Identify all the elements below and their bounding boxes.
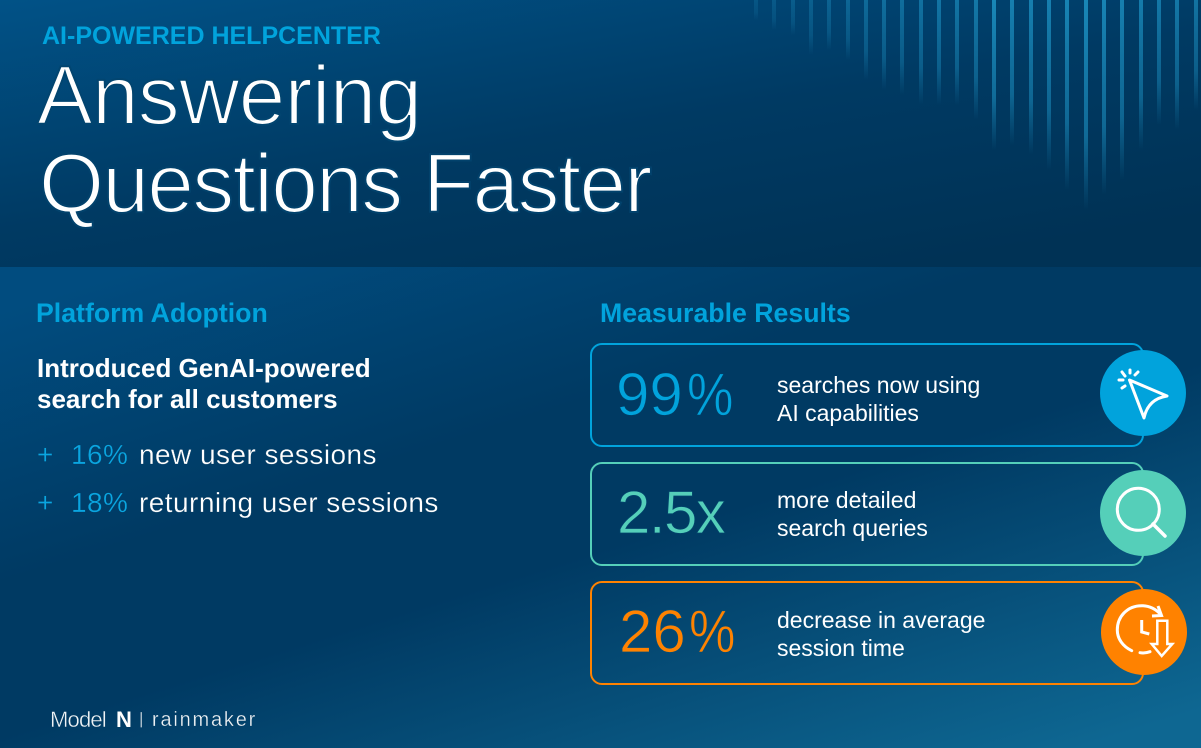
card: 2.5x	[590, 462, 1144, 566]
title: Questions Faster	[39, 136, 651, 230]
text: queries: search queries	[777, 515, 928, 541]
number: 99%: 99	[616, 361, 683, 428]
eyebrow heading: AI-POWERED HELPCENTER	[42, 22, 381, 50]
logo	[50, 707, 257, 732]
heading: platform adoption: Platform Adoption	[36, 298, 268, 328]
panel: platform adoption	[36, 298, 439, 518]
text: searches: AI capabilities	[777, 400, 919, 426]
heading: measurable results: Measurable Results	[600, 298, 851, 328]
number: 26%: %	[689, 598, 735, 665]
stat: new user sessions	[37, 439, 377, 470]
stat: returning user sessions: returning user sessions	[139, 487, 439, 518]
icon: clock with down arrow	[1101, 589, 1187, 675]
number: 26%: 26	[619, 598, 686, 665]
card: 26%	[590, 581, 1144, 685]
text: session time: session time	[777, 635, 905, 661]
text: session time	[777, 607, 985, 661]
text: session time: decrease in average	[777, 607, 985, 633]
title: Answering	[37, 48, 421, 142]
stat: returning user sessions: +	[37, 487, 54, 518]
stat: new user sessions: +	[37, 439, 54, 470]
text: introduced GenAI search	[37, 353, 371, 414]
logo: N	[116, 707, 132, 732]
number: 99%	[616, 361, 733, 428]
stat: new user sessions: 16%	[71, 439, 128, 470]
header background with light stripes	[0, 0, 1201, 242]
icon: magnifier	[1100, 470, 1186, 556]
text: introduced GenAI search: Introduced GenAI-powered	[37, 353, 371, 383]
card: 99%	[590, 343, 1144, 447]
number: 26%	[619, 598, 735, 665]
text: introduced GenAI search: search for all customers	[37, 384, 338, 414]
icon: cursor	[1100, 350, 1186, 436]
stat: new user sessions: new user sessions	[139, 439, 377, 470]
text: searches: searches now using	[777, 372, 980, 398]
number: 2.5x: 2.5x	[617, 479, 724, 546]
text: queries	[777, 487, 928, 541]
text: searches	[777, 372, 980, 426]
title	[37, 48, 652, 230]
stat: returning user sessions: 18%	[71, 487, 128, 518]
text: queries: more detailed	[777, 487, 916, 513]
logo: rainmaker	[152, 709, 257, 731]
lower background panel	[0, 267, 1201, 748]
logo: Model	[50, 707, 106, 732]
logo: |	[139, 709, 143, 728]
number: 99%: %	[687, 361, 733, 428]
